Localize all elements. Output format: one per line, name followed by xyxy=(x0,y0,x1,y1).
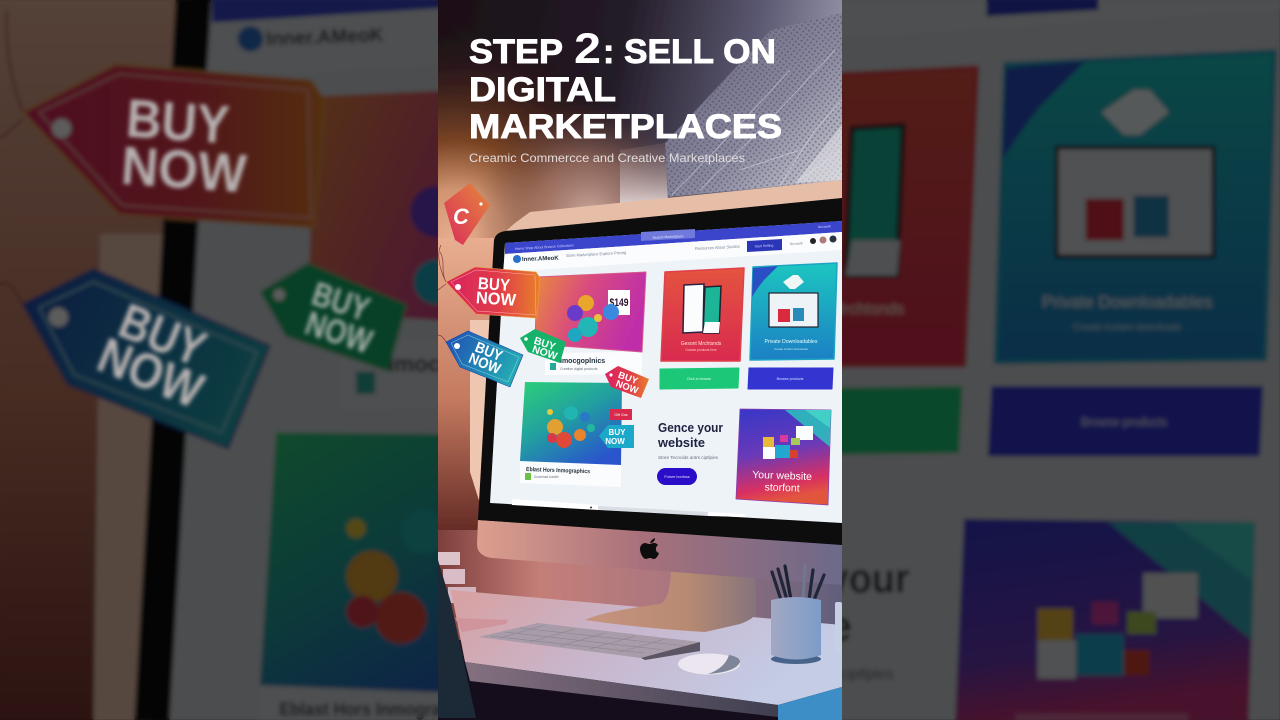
green buy now tag: BUY xyxy=(532,335,557,353)
storefront card: Your website xyxy=(752,469,812,483)
enlarged buy now labels: NOW xyxy=(300,304,378,362)
pen cup xyxy=(771,597,821,664)
enlarged wall xyxy=(0,0,192,720)
subtitle: Creamic Commercce and Creative Marketplaces xyxy=(469,151,745,165)
product card: ebook infographics xyxy=(520,382,622,487)
enlarged tag strings xyxy=(1,10,23,304)
enlarged blue button: Browse products xyxy=(1081,417,1167,429)
small description: Store Tecnoids antrs ciptlpies xyxy=(658,455,719,461)
title xyxy=(469,25,782,146)
enlarged blue button xyxy=(990,388,1262,455)
product card: merchandise: Gesont Mrchtsnds xyxy=(681,341,722,347)
red buy now tag xyxy=(446,267,540,318)
blue button xyxy=(748,368,833,389)
top coupon tag: C xyxy=(453,204,470,229)
enlarged buy now labels: NOW xyxy=(90,327,212,419)
red buy now tag: NOW xyxy=(475,288,517,310)
wall under monitor xyxy=(438,530,842,640)
enlarged blue tag xyxy=(23,269,270,448)
purple call to action: Future bonfoss xyxy=(664,475,690,479)
tag strings xyxy=(438,244,446,342)
product card: private downloadables xyxy=(750,263,837,360)
product card: infographics xyxy=(535,272,646,375)
monitor stand xyxy=(585,570,756,632)
page header: Store Marketplace Explore Pricing xyxy=(566,250,626,258)
gift label xyxy=(610,409,632,420)
enlarged ebook card: Eblast Hors Inmographics xyxy=(279,698,484,719)
apple logo xyxy=(640,538,659,559)
enlarged green tag xyxy=(260,263,407,372)
nav bar: Home Shop About Browse Collections xyxy=(515,243,574,251)
page header xyxy=(503,232,842,272)
enlarged infographics card xyxy=(308,80,663,410)
books on desk xyxy=(438,552,476,603)
enlarged page header xyxy=(206,0,1280,80)
orange buy now tag: NOW xyxy=(614,378,640,397)
enlarged downloadables card xyxy=(996,52,1274,362)
nav bar xyxy=(505,221,842,254)
website heading: website xyxy=(657,435,705,450)
blue buy now tag: NOW xyxy=(466,350,504,378)
enlarged website heading: Gence your xyxy=(702,554,910,601)
website heading: Gence your xyxy=(658,420,723,435)
title: DIGITAL xyxy=(469,71,616,109)
enlarged page header: Inner.AMeoK xyxy=(266,25,384,50)
keyboard xyxy=(478,623,700,660)
top coupon tag xyxy=(444,183,490,245)
teal buy now tag xyxy=(599,425,634,448)
enlarged ebook card xyxy=(260,432,586,720)
title: MARKETPLACES xyxy=(469,108,782,146)
gift label: Gift Gos xyxy=(614,413,628,417)
enlarged buy now labels xyxy=(90,88,378,419)
enlarged nav bar strip xyxy=(212,0,570,23)
enlarged buy now labels: NOW xyxy=(119,136,248,204)
foreground dark object xyxy=(438,560,476,718)
storefront card: storfont xyxy=(764,481,800,495)
blue button: Browse products xyxy=(777,377,804,381)
green buy now tag xyxy=(520,329,566,363)
product card: private downloadables: Create instant downloads xyxy=(774,347,808,351)
enlarged buy now labels: BUY xyxy=(307,275,374,329)
page bottom strip xyxy=(512,499,745,517)
enlarged buy now labels: BUY xyxy=(111,292,214,377)
blue buy now tag xyxy=(446,331,523,387)
red buy now tag: BUY xyxy=(477,274,511,295)
purple call to action xyxy=(657,468,697,485)
product card: merchandise xyxy=(661,268,744,361)
website heading xyxy=(658,423,723,447)
enlarged website heading: website xyxy=(701,602,852,649)
green button: Click to browse xyxy=(687,377,711,381)
title: : xyxy=(603,33,614,71)
product card: ebook infographics: Eblast Hors Inmographics xyxy=(526,467,591,475)
page header: Start Selling xyxy=(754,244,774,248)
page header: Inner.AMeoK xyxy=(522,256,559,263)
nav bar: Account xyxy=(818,224,831,229)
pens xyxy=(772,565,824,600)
teal buy now tag: BUY xyxy=(609,428,626,437)
screen xyxy=(490,221,842,523)
monitor back edge xyxy=(506,180,842,231)
blue buy now tag: BUY xyxy=(472,339,505,365)
product card: infographics: $149 xyxy=(610,297,628,309)
enlarged buy now labels: BUY xyxy=(124,88,231,156)
title: 2 xyxy=(574,25,601,73)
backdrop wall xyxy=(438,0,842,720)
title: SELL ON xyxy=(624,33,776,71)
product card: merchandise: Custom products here xyxy=(685,348,717,352)
enlarged website heading xyxy=(701,554,910,683)
enlarged merchandise card xyxy=(711,68,977,365)
teal buy now tag: NOW xyxy=(605,437,625,446)
enlarged website heading: Store Tecnoids antrs ciptlpies xyxy=(702,666,894,683)
orange buy now tag xyxy=(605,366,649,398)
page header: Resources About Studios xyxy=(695,244,740,251)
enlarged merchandise card: Gesont Mrchtsnds xyxy=(774,301,904,318)
desk xyxy=(438,590,842,720)
storefront card xyxy=(736,409,831,505)
product card: private downloadables: Private Downloadables xyxy=(764,339,818,345)
enlarged downloadables card: Private Downloadables xyxy=(1042,293,1212,312)
page header: Account xyxy=(790,241,803,246)
title: STEP xyxy=(469,33,563,71)
nav bar: Search Marketplace xyxy=(652,234,684,240)
green buy now tag: NOW xyxy=(531,343,559,363)
product card: infographics: Imocgoplnics xyxy=(560,358,605,365)
enlarged green button xyxy=(708,388,961,455)
mouse xyxy=(678,654,740,674)
enlarged downloadables card: Create instant downloads xyxy=(1073,322,1182,333)
enlarged storefront card xyxy=(955,519,1255,720)
product card: ebook infographics: Download bundle xyxy=(534,475,559,479)
orange buy now tag: BUY xyxy=(617,370,640,387)
enlarged infographics card: Imocgoplnics xyxy=(388,352,532,377)
product card: infographics: Creative digital products xyxy=(560,367,598,371)
monitor bezel xyxy=(478,198,842,545)
glass jar xyxy=(835,602,842,625)
green button xyxy=(660,368,739,389)
central photo: desk scene with monitor xyxy=(432,0,842,720)
enlarged red tag xyxy=(23,64,324,228)
paper on desk xyxy=(455,618,508,632)
monitor chin xyxy=(477,520,842,585)
